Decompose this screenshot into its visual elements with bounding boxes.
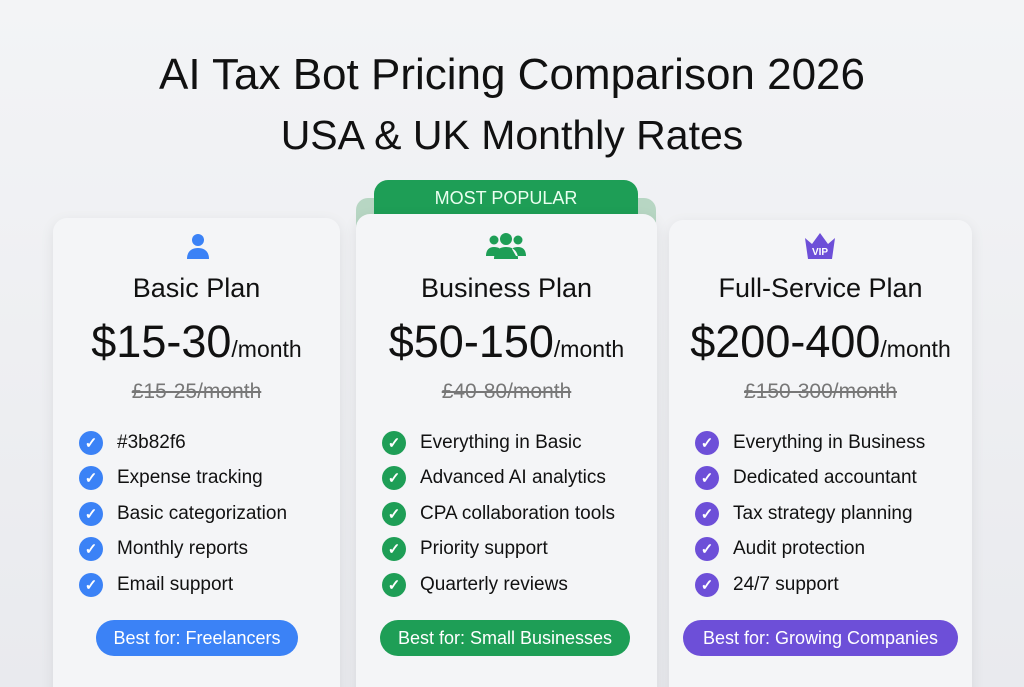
features: ✓ (85, 435, 97, 452)
uk price: £40-80/month (442, 380, 571, 403)
features: ✓ (85, 506, 97, 523)
heading: Full-Service Plan (718, 273, 923, 303)
icon: group (486, 233, 526, 259)
uk price: £150-300/month (744, 380, 897, 403)
features (382, 431, 615, 597)
features: Priority support (420, 538, 548, 559)
features: ✓ (388, 577, 400, 594)
features: ✓ (701, 577, 713, 594)
panel: full-service plan (669, 220, 972, 687)
best for pill (683, 620, 958, 656)
features: ✓ (701, 541, 713, 558)
features: ✓ (85, 541, 97, 558)
uk price: £15-25/month (132, 380, 261, 403)
features: Everything in Business (733, 432, 925, 453)
features: ✓ (388, 435, 400, 452)
features: Tax strategy planning (733, 503, 913, 524)
features: Everything in Basic (420, 432, 582, 453)
features: Expense tracking (117, 467, 263, 488)
features: CPA collaboration tools (420, 503, 615, 524)
features: ✓ (388, 541, 400, 558)
icon: vip crown (805, 233, 835, 259)
features: 24/7 support (733, 574, 839, 595)
features: Basic categorization (117, 503, 287, 524)
features: Dedicated accountant (733, 467, 917, 488)
features: Audit protection (733, 538, 865, 559)
features: ✓ (85, 470, 97, 487)
features: ✓ (701, 435, 713, 452)
features: #3b82f6 (117, 432, 186, 453)
features: Quarterly reviews (420, 574, 568, 595)
best for pill: Best for: Freelancers (113, 628, 281, 648)
price: $200-400/month (690, 316, 951, 367)
icon: vip crown: VIP (812, 247, 828, 258)
features (695, 431, 925, 597)
features: ✓ (388, 506, 400, 523)
features: Advanced AI analytics (420, 467, 606, 488)
features: Email support (117, 574, 233, 595)
price: $15-30/month (91, 316, 302, 367)
features: ✓ (85, 577, 97, 594)
banner: most popular (356, 180, 656, 227)
heading: Basic Plan (133, 273, 260, 303)
features: ✓ (388, 470, 400, 487)
features: Monthly reports (117, 538, 248, 559)
best for pill: Best for: Growing Companies (703, 628, 938, 648)
subtitle: USA & UK Monthly Rates (281, 112, 743, 158)
panel: basic plan (53, 218, 340, 687)
heading: Business Plan (421, 273, 592, 303)
panel: business plan (356, 214, 657, 687)
best for pill (380, 620, 630, 656)
features: ✓ (701, 470, 713, 487)
icon: user (187, 234, 209, 259)
best for pill: Best for: Small Businesses (398, 628, 612, 648)
price: $50-150/month (389, 316, 624, 367)
title: AI Tax Bot Pricing Comparison 2026 (159, 50, 865, 99)
banner: most popular: MOST POPULAR (435, 188, 577, 208)
best for pill (96, 620, 298, 656)
features: ✓ (701, 506, 713, 523)
features (79, 431, 287, 597)
